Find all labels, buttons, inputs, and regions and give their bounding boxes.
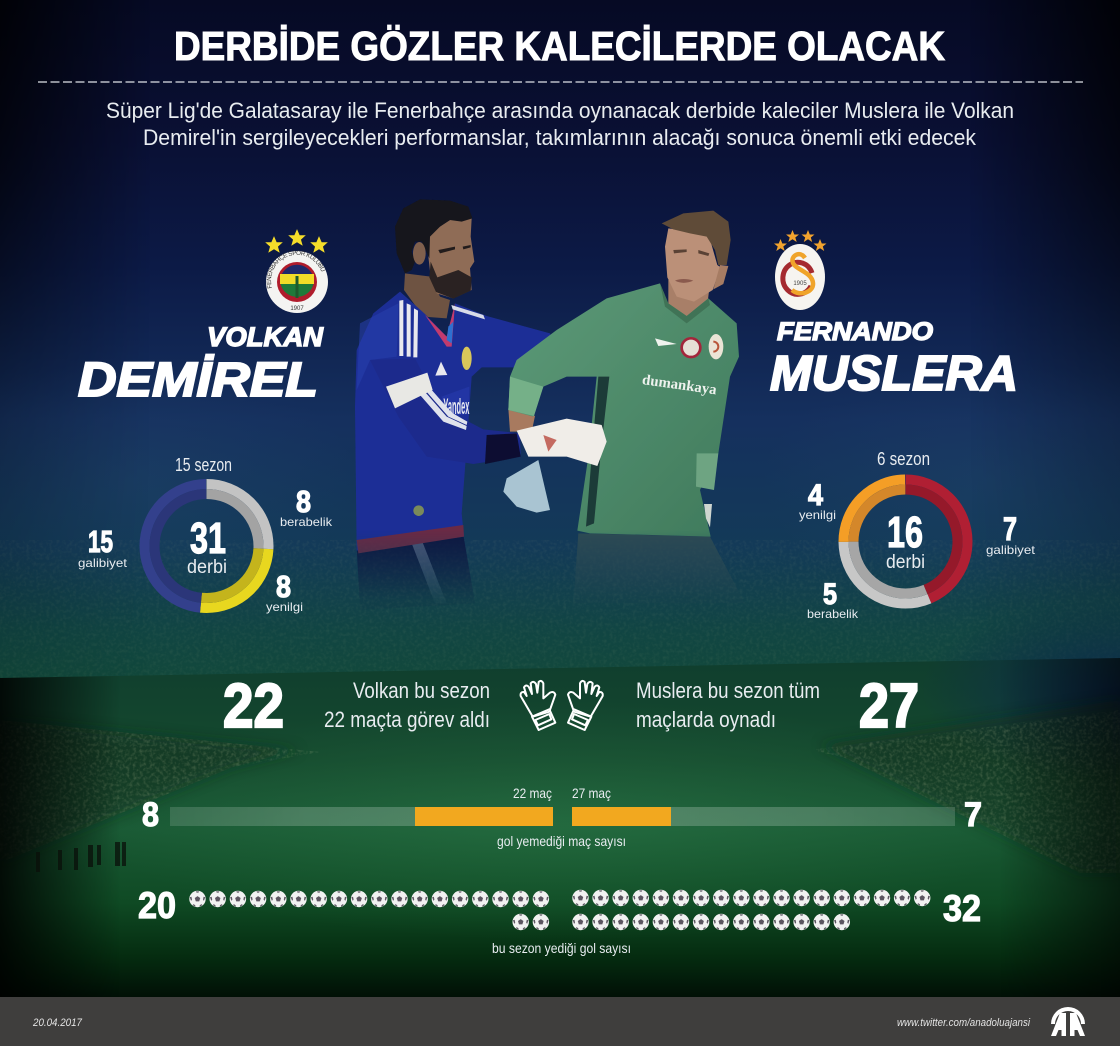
- name: Volkan Demirel: [78, 322, 324, 407]
- player: Volkan Demirel body: Yandex: [443, 394, 470, 419]
- donut chart: Volkan: 15 sezon: [175, 455, 232, 475]
- name: Fernando Muslera: [770, 318, 1018, 401]
- donut chart: Volkan: 31: [190, 514, 226, 563]
- Galatasaray logo: 1905: [793, 281, 807, 287]
- goals conceded caption: bu sezon yediği gol sayısı: [492, 940, 631, 956]
- icon: Anadolu Agency logo: [1051, 1007, 1085, 1036]
- bar chart: clean sheets: 27 maç: [572, 785, 611, 801]
- Galatasaray logo: [774, 230, 826, 310]
- donut chart: Muslera: 4: [808, 479, 823, 512]
- goals conceded: Volkan: [138, 885, 549, 930]
- Fenerbahçe logo: [265, 229, 328, 313]
- match count: Volkan: [223, 672, 490, 741]
- donut chart: Volkan: derbi: [187, 557, 227, 578]
- donut chart: Muslera: derbi: [886, 552, 925, 573]
- goals conceded: Muslera: [572, 888, 981, 930]
- match count: Muslera: 27: [859, 672, 919, 741]
- footer: www.twitter.com/anadoluajansi: [897, 1017, 1030, 1029]
- name: Fernando Muslera: FERNANDO: [777, 318, 934, 346]
- three yellow stars: [265, 229, 328, 253]
- donut chart: Volkan: [78, 455, 333, 614]
- Fenerbahçe logo: 1907: [290, 306, 304, 312]
- title: DERBİDE GÖZLER KALECİLERDE OLACAK: [174, 23, 945, 69]
- donut chart: Muslera: galibiyet: [986, 543, 1036, 557]
- player: Volkan Demirel arm and gloves: [370, 358, 607, 513]
- donut chart: Muslera: [799, 449, 1036, 621]
- donut chart: Muslera: 16: [887, 508, 923, 557]
- match count: Volkan: 22: [223, 672, 284, 741]
- footer: [0, 997, 1120, 1046]
- player: Volkan Demirel head: [395, 199, 474, 299]
- player: Volkan Demirel body: [355, 273, 553, 610]
- name: Volkan Demirel: VOLKAN: [207, 322, 324, 352]
- match count: Muslera: [636, 672, 919, 741]
- name: Volkan Demirel: DEMİREL: [78, 354, 318, 407]
- name: Fernando Muslera: MUSLERA: [770, 347, 1018, 401]
- player: Fernando Muslera: [508, 211, 745, 603]
- goals conceded: Volkan: 20: [138, 885, 176, 926]
- intro text: Demirel'in sergileyecekleri performanslar, takımlarının alacağı sonuca önemli etki edecek: [143, 125, 977, 150]
- footer: 20.04.2017: [32, 1017, 83, 1029]
- four orange stars: [774, 230, 826, 251]
- intro text: [106, 98, 1014, 150]
- donut chart: Muslera: yenilgi: [799, 508, 836, 522]
- match count: Volkan: Volkan bu sezon: [353, 678, 490, 703]
- Fenerbahçe logo: FENERBAHÇE SPOR KULÜBÜ: [266, 250, 326, 288]
- match count: Muslera: Muslera bu sezon tüm: [636, 678, 820, 703]
- bar chart: clean sheets: gol yemediği maç sayısı: [497, 833, 626, 849]
- bar chart: clean sheets: 7: [964, 796, 982, 834]
- player: Fernando Muslera: dumankaya: [641, 372, 718, 398]
- match count: Muslera: maçlarda oynadı: [636, 707, 776, 732]
- donut chart: Muslera: 6 sezon: [877, 449, 930, 469]
- photo: two goalkeepers: [355, 199, 745, 610]
- donut chart: Volkan: galibiyet: [78, 556, 128, 570]
- donut chart: Muslera: berabelik: [807, 607, 859, 621]
- pitch-side figures: [36, 842, 126, 872]
- bar chart: clean sheets: 22 maç: [513, 785, 552, 801]
- intro text: Süper Lig'de Galatasaray ile Fenerbahçe arasında oynanacak derbide kaleciler Muslera ile Volkan: [106, 98, 1014, 123]
- bar chart: clean sheets: [142, 785, 982, 849]
- donut chart: Muslera: 7: [1003, 511, 1017, 547]
- donut chart: Volkan: 15: [88, 524, 113, 559]
- donut chart: Volkan: 8: [296, 484, 311, 519]
- match count: Volkan: 22 maçta görev aldı: [324, 707, 490, 732]
- donut chart: Volkan: 8: [276, 569, 291, 604]
- donut chart: Volkan: berabelik: [280, 515, 333, 529]
- goals conceded: Muslera: 32: [943, 888, 981, 929]
- donut chart: Volkan: yenilgi: [266, 600, 303, 614]
- donut chart: Muslera: 5: [823, 578, 837, 611]
- bar chart: clean sheets: 8: [142, 796, 159, 834]
- icon: goalkeeper gloves: [521, 681, 603, 730]
